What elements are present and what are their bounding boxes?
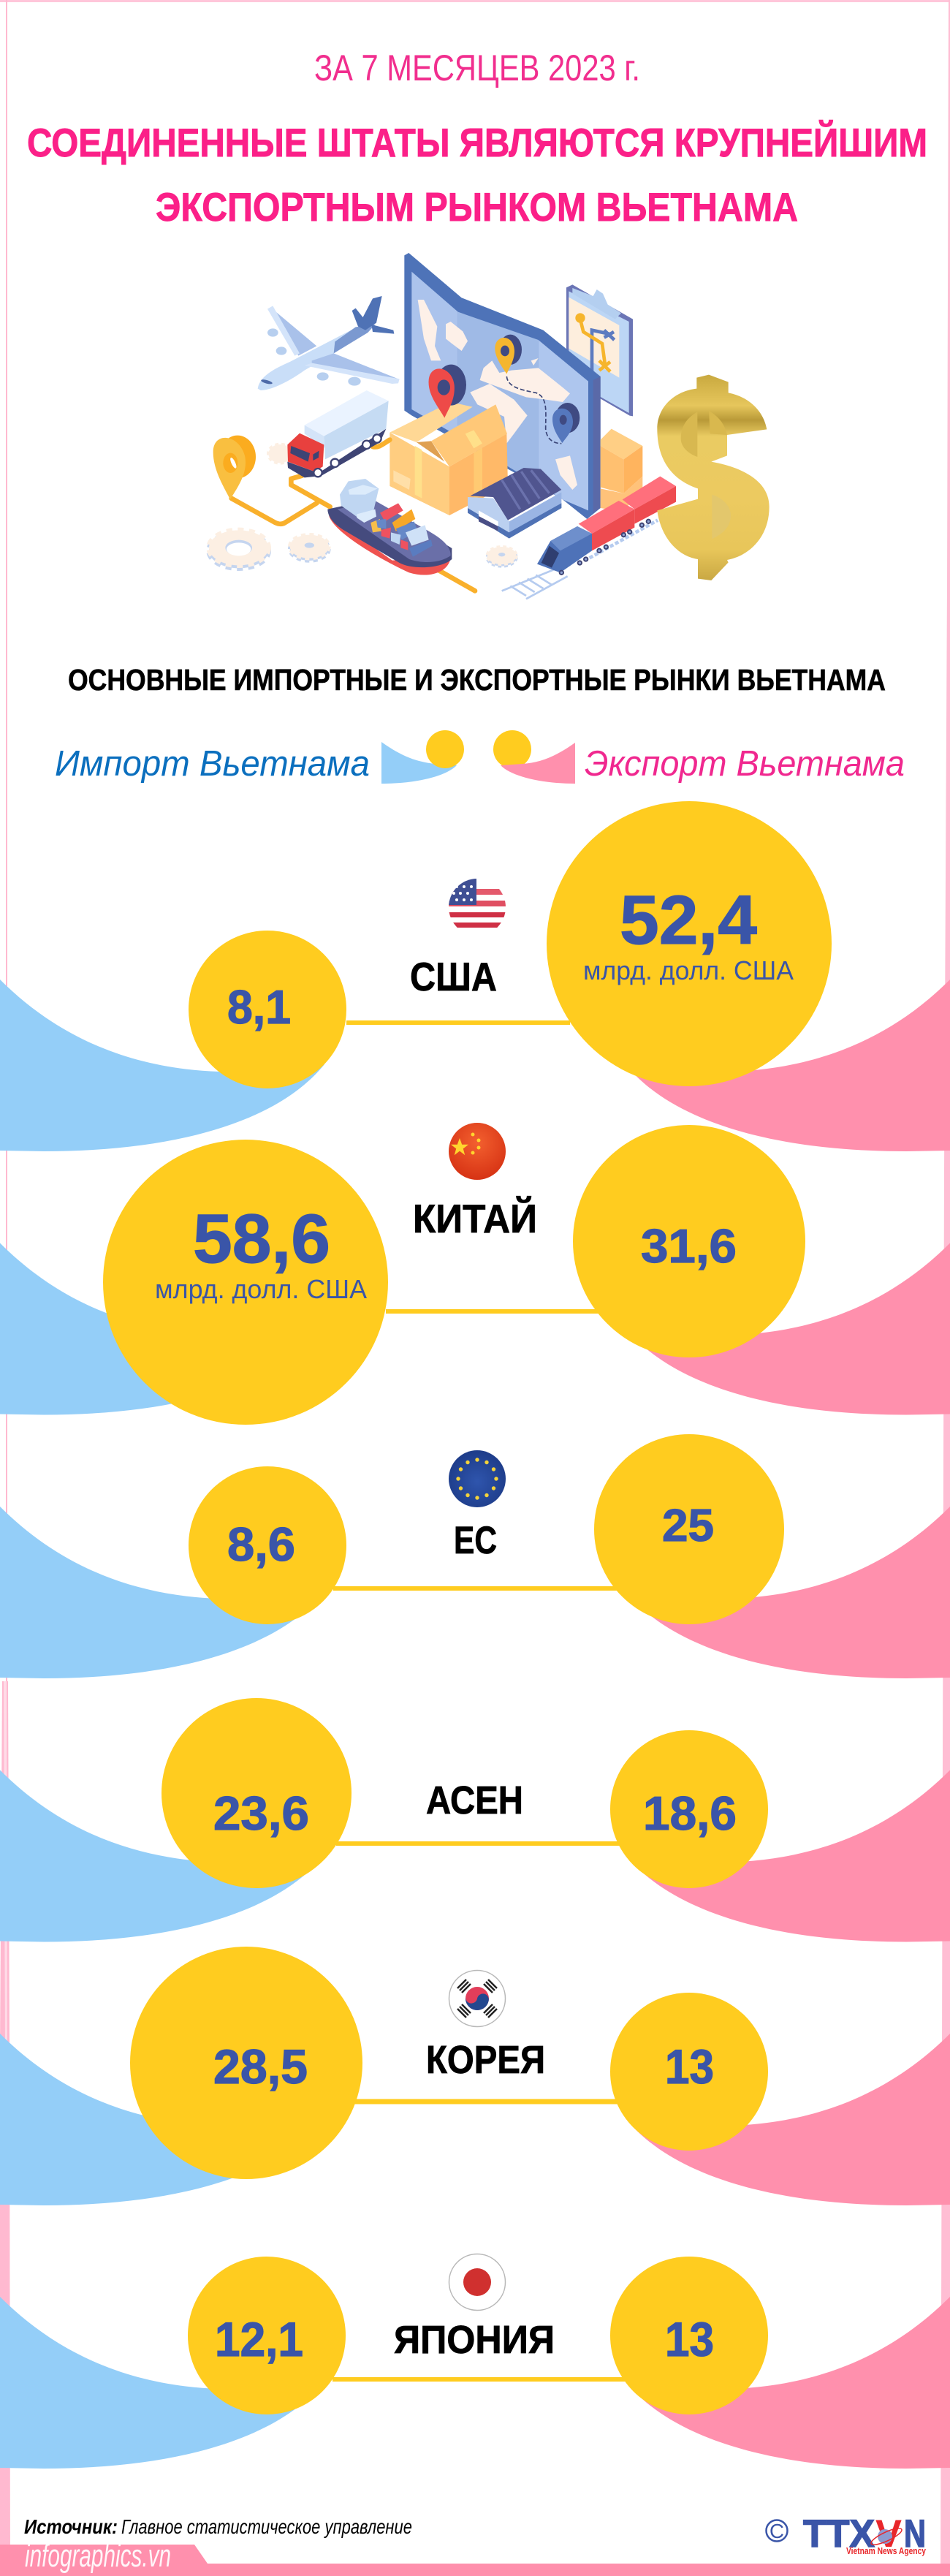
pin: red [429,365,466,418]
connector [386,1309,599,1314]
import crescent [0,1243,324,1415]
country name: АСЕН [426,1778,523,1822]
country name: ЯПОНИЯ [394,2318,555,2362]
export bubble [610,2257,768,2414]
flag: China [449,1123,506,1180]
import bubble [130,1947,362,2179]
gears [209,444,517,568]
export crescent [626,2297,950,2469]
import value: 8,1 [227,980,291,1034]
flag: Korea [449,1971,506,2026]
connector [354,2099,618,2104]
row: USA [0,801,950,1151]
source line: Главное статистическое управление [121,2515,412,2538]
map board [404,253,601,519]
export bubble [573,1125,805,1357]
logo: TTXVN: N [904,2512,926,2556]
row: Japan [0,2254,950,2469]
title [27,119,927,230]
export crescent [626,980,950,1151]
export value: 52,4 [620,882,757,959]
icon: gold dollar sign [657,375,770,580]
import crescent [0,980,324,1151]
icon: clipboard [566,284,633,416]
icon: truck [287,390,389,477]
row: ASEAN [0,1698,950,1942]
export crescent [626,1507,950,1678]
legend: import: Импорт Вьетнама [55,744,370,784]
export value: 18,6 [643,1787,737,1840]
row: EU [0,1434,950,1678]
export value: 13 [665,2312,714,2366]
import value: 12,1 [215,2312,303,2366]
subtitle: period: ЗА 7 МЕСЯЦЕВ 2023 г. [314,48,640,88]
country name: ЕС [454,1519,497,1562]
logo: TTXVN: Vietnam News Agency [846,2545,927,2556]
logo: TTXVN: C [770,2520,784,2542]
export crescent [626,2034,950,2205]
icon: airplane [258,296,400,390]
import crescent [0,2297,324,2469]
pin: yellow [495,335,522,374]
legend: export: Экспорт Вьетнама [585,744,905,784]
unit: млрд. долл. США [583,955,794,985]
import bubble [189,1466,346,1624]
legend: export [493,730,905,784]
import bubble [188,2257,346,2414]
legend: import [55,730,464,784]
import value: 8,6 [227,1518,295,1571]
export crescent [626,1243,950,1415]
export value: 31,6 [641,1219,737,1273]
import crescent [0,1507,324,1678]
flag: USA [449,879,506,928]
import crescent [0,1770,324,1942]
import bubble [162,1698,352,1888]
source line: Источник: [24,2515,118,2538]
import bubble [189,931,346,1088]
icon: orange route and pin [213,436,475,591]
country name: КОРЕЯ [426,2038,545,2082]
import bubble [103,1140,388,1425]
unit: млрд. долл. США [155,1274,367,1304]
connector [336,1841,621,1846]
logo: TTXVN [766,2512,927,2556]
export value: 25 [662,1501,714,1551]
title: ЭКСПОРТНЫМ РЫНКОМ ВЬЕТНАМА [156,184,798,230]
export crescent [626,1770,950,1942]
country name: КИТАЙ [413,1195,537,1241]
big cardboard box [390,402,508,515]
map continents [418,300,577,490]
export bubble [610,1993,768,2151]
flag: EU [449,1450,506,1507]
logo: TTXVN: TTX [803,2512,875,2556]
connector [346,1020,570,1025]
import value: 58,6 [193,1200,330,1278]
import value: 23,6 [213,1787,309,1840]
export bubble [610,1730,768,1888]
export bubble [547,801,832,1086]
small boxes [601,429,642,512]
export value: 13 [665,2039,714,2094]
icon: train [502,477,676,599]
dashed route [506,376,561,444]
flag: Japan [449,2254,506,2310]
row: Korea [0,1947,950,2205]
country name: США [410,954,497,999]
footer bar [0,2538,950,2576]
logo: TTXVN: V [875,2512,902,2556]
connector [333,1586,618,1591]
footer bar: infographics.vn [25,2538,171,2574]
export bubble [594,1434,784,1624]
import value: 28,5 [213,2039,308,2094]
warehouse [468,468,561,539]
icon: container ship [327,479,452,575]
illustration: logistics scene [209,253,770,599]
row: China [0,1123,950,1425]
import crescent [0,2034,324,2205]
pin: blue [552,403,580,443]
connector [332,2377,625,2382]
